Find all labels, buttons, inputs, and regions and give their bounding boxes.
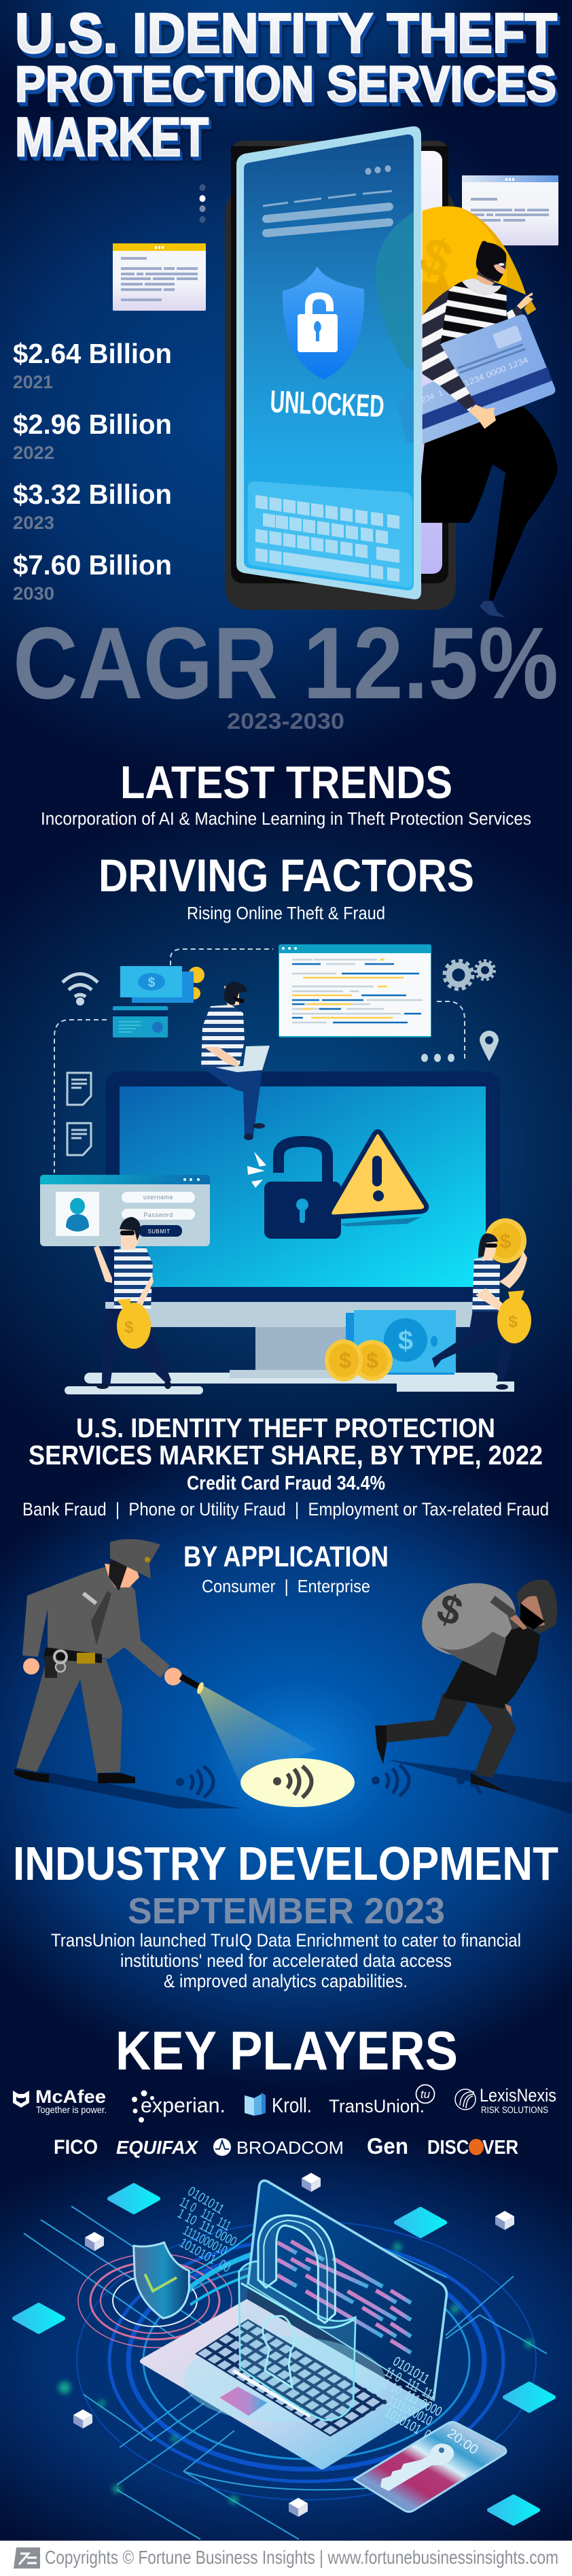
laptop screen: [248, 2180, 446, 2400]
flashlight beam: [199, 1686, 317, 1781]
touchpad: [219, 2387, 267, 2416]
stat 2023: [13, 479, 172, 533]
stat 2030: $7.60 Billion: [13, 549, 172, 581]
logo: LexisNexis: RISK SOLUTIONS: [481, 2105, 548, 2115]
unlocked text: UNLOCKED: [270, 383, 385, 424]
binary digits upper: 1010101 00: [177, 2235, 233, 2276]
binary digits upper: 11 0 111 111: [177, 2195, 233, 2234]
location pin icon: [480, 1031, 499, 1061]
driving factors illustration: [40, 944, 531, 1394]
shackle inner line: [264, 2220, 327, 2320]
stat 2030: [13, 549, 172, 604]
logo: Equifax: EQUIFAX: [116, 2137, 199, 2158]
thief legs: [421, 394, 558, 602]
white collar: [462, 279, 501, 295]
logo: TransUnion: TransUnion.: [329, 2096, 425, 2116]
stat 2021: 2021: [13, 372, 53, 392]
login window: [40, 1175, 210, 1246]
stat 2022: 2022: [13, 443, 54, 463]
CAGR period: 2023-2030: [227, 708, 344, 734]
binary digits upper: 0101011: [185, 2184, 226, 2217]
login window: username: [143, 1194, 173, 1201]
logo: McAfee: Together is power.: [36, 2104, 107, 2115]
binary digits lower: 1010101 00: [382, 2405, 438, 2445]
laptop base: [140, 2299, 430, 2469]
left hand: [469, 405, 496, 429]
gold coins: [325, 1339, 393, 1381]
thief figure with sack and card: [412, 206, 555, 444]
gold coins: $: [366, 1348, 378, 1373]
right hand and knot: [517, 292, 533, 309]
face slit: [494, 262, 506, 274]
right sleeve: [507, 307, 522, 320]
logo: Kroll: [245, 2093, 312, 2117]
cyan swooshes: [188, 2231, 256, 2305]
footer logo: [14, 2547, 40, 2569]
neck and collar: [477, 275, 495, 286]
credit card: 1234 0000 1234: [463, 355, 530, 388]
driving factors heading: DRIVING FACTORS: [99, 850, 474, 901]
latest trends heading: LATEST TRENDS: [120, 757, 452, 808]
padlock: [264, 1141, 341, 1239]
logo: TransUnion: tu: [421, 2088, 431, 2101]
dashed connector lines: [54, 949, 465, 1173]
police officer: [14, 1539, 205, 1783]
right thief with coin and bag: $: [508, 1313, 518, 1331]
stat 2030: 2030: [13, 583, 54, 604]
phone with key: [354, 2422, 506, 2511]
binary digits lower: [380, 2354, 444, 2445]
orbit rings: [77, 2221, 536, 2500]
gold coins: $: [339, 1348, 351, 1373]
shield: [134, 2242, 189, 2318]
glow nodes: [58, 2243, 533, 2504]
lock sparks: [247, 1152, 266, 1188]
application illustration: [14, 1539, 572, 1814]
phone back: [225, 141, 456, 610]
login window: Password: [143, 1212, 173, 1218]
glass padlock body: [239, 2261, 355, 2420]
monitor: [105, 1071, 500, 1378]
shield icon: [283, 267, 364, 379]
hinge shadow: [247, 2284, 433, 2405]
development description: institutions' need for accelerated data access: [120, 1951, 452, 1971]
faded signal icons: [176, 1765, 481, 1798]
footer bar: [0, 2541, 572, 2576]
warning triangle: [329, 1131, 427, 1226]
card icon: [113, 1006, 168, 1037]
gears icon: [444, 961, 495, 989]
market size stats: [13, 338, 172, 604]
logo: Experian: experian.: [141, 2093, 226, 2117]
tinted card behind glass: [397, 388, 414, 443]
keyhole: [263, 2316, 295, 2388]
dollar bill: $: [398, 1326, 413, 1356]
ground shadows: [40, 1759, 572, 1814]
spotlight: [240, 1758, 355, 1807]
glass phone panel: [236, 126, 421, 600]
three dots: [421, 1054, 454, 1062]
stat 2023: $3.32 Billion: [13, 479, 172, 510]
logo: Gen: Gen: [367, 2133, 408, 2159]
document card right: [462, 175, 558, 245]
sack lower shade: [423, 270, 450, 316]
sack shaded edge: [460, 207, 526, 294]
driving factors text: Rising Online Theft & Fraud: [187, 904, 385, 923]
pink rings: [78, 2254, 232, 2348]
logo: Discover: DISCOVER: [427, 2137, 518, 2159]
left thief with money bag: [94, 1217, 171, 1389]
hacker with laptop: [201, 982, 270, 1140]
document icons: [67, 1073, 91, 1155]
development description: [51, 1930, 521, 1991]
stat 2021: $2.64 Billion: [13, 338, 172, 369]
stat 2023: 2023: [13, 513, 54, 533]
left thief with money bag: $: [124, 1318, 134, 1337]
signal icon on spotlight: [273, 1766, 311, 1798]
laptop, lock and shield drawn at 3x local scale: [140, 2180, 446, 2469]
stat 2022: $2.96 Billion: [13, 409, 172, 440]
fleeing thief: $: [431, 1584, 468, 1635]
tinted sack behind glass: [376, 212, 414, 371]
binary digits lower: 0101011: [390, 2354, 431, 2387]
market share heading: [29, 1413, 543, 1471]
torso stripes: [440, 281, 507, 345]
title: MARKET: [15, 107, 209, 168]
market share heading: U.S. IDENTITY THEFT PROTECTION: [76, 1413, 495, 1443]
lock glow: [183, 2337, 385, 2422]
latest trends text: Incorporation of AI & Machine Learning in Theft Protection Services: [41, 810, 531, 829]
binary digits upper: 1111000010: [181, 2223, 230, 2259]
binary digits upper: 1 10 111 0000: [175, 2206, 239, 2250]
carousel dots: [200, 184, 205, 223]
cash icon: $: [148, 976, 156, 990]
padlock top edge: [241, 2283, 354, 2328]
title: [15, 1, 557, 168]
keyboard: [195, 2319, 389, 2437]
white cubes: [73, 2173, 514, 2517]
phone screen behind glass: [258, 151, 442, 574]
circuit lines: [24, 2206, 547, 2539]
glass keyboard: [248, 481, 412, 587]
code window: [279, 944, 431, 1037]
cyber security illustration: [14, 2173, 554, 2539]
spacebar: [233, 2371, 310, 2416]
key players heading: KEY PLAYERS: [115, 2021, 458, 2082]
binary digits lower: 1 10 111 0000: [380, 2376, 444, 2420]
glass text lines: [263, 191, 392, 206]
credit card: [420, 315, 555, 444]
company logos: [13, 2084, 556, 2159]
logo: LexisNexis: LexisNexis: [480, 2085, 556, 2106]
wifi icon: [62, 974, 98, 1003]
floor platforms: [65, 1373, 514, 1394]
binary digits upper: [175, 2184, 239, 2276]
credit card fraud share: Credit Card Fraud 34.4%: [187, 1473, 385, 1494]
logo: LexisNexis: [455, 2085, 556, 2115]
logo: FICO: FICO: [54, 2136, 98, 2159]
login window: SUBMIT: [147, 1229, 171, 1235]
stat 2021: [13, 338, 172, 392]
sack: [423, 206, 526, 316]
logo: TransUnion: [329, 2084, 435, 2116]
logo: McAfee: McAfee: [35, 2086, 106, 2107]
by application heading: BY APPLICATION: [183, 1541, 389, 1573]
logo: McAfee: [13, 2086, 107, 2115]
phone with key: 20:00: [444, 2426, 481, 2458]
right thief with coin and bag: $: [500, 1231, 512, 1253]
logo: Experian: [132, 2090, 226, 2123]
stat 2022: [13, 409, 172, 463]
cyan diamonds: [14, 2185, 554, 2524]
date: SEPTEMBER 2023: [128, 1891, 445, 1931]
balaclava head: [476, 241, 506, 282]
development description: & improved analytics capabilities.: [164, 1971, 408, 1991]
left sleeve: [423, 290, 476, 411]
right thief with coin and bag: [432, 1218, 531, 1390]
laptop overlay details: [134, 2215, 355, 2420]
glass dots: [365, 165, 391, 175]
knit neck band: [477, 270, 495, 283]
dollar bill: [346, 1310, 456, 1375]
glass shackle: [258, 2215, 335, 2323]
binary digits lower: 11 0 111 111: [382, 2365, 438, 2404]
dollar mark on sack: $: [412, 226, 460, 290]
application types: Consumer | Enterprise: [202, 1576, 370, 1596]
credit card: 234 1: [420, 388, 444, 405]
document card left: [113, 243, 206, 311]
development description: TransUnion launched TruIQ Data Enrichment to cater to financial: [51, 1930, 521, 1951]
binary digits lower: 1111000010: [386, 2393, 435, 2428]
logo: Broadcom: BROADCOM: [236, 2137, 344, 2158]
cash icon: [120, 966, 204, 1003]
logo: Kroll: Kroll.: [272, 2093, 312, 2117]
thief shoe: [480, 601, 505, 617]
fleeing thief: [375, 1573, 557, 1793]
hero illustration: phone and thief: [225, 126, 558, 617]
